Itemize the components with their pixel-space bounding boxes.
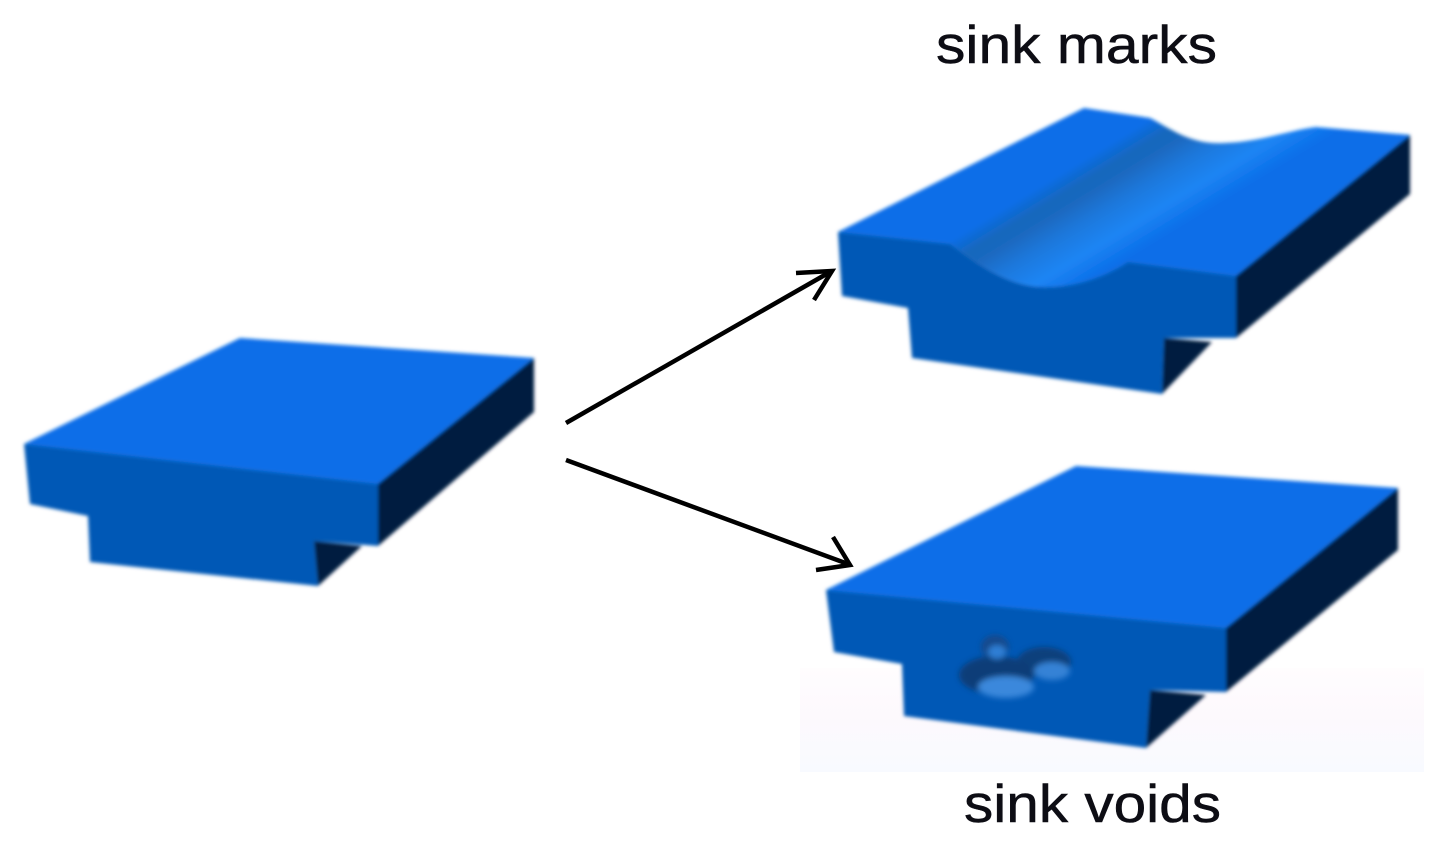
- label: sink voids: sink voids: [964, 775, 1221, 834]
- shape: sink voids part: [826, 466, 1398, 748]
- label: sink marks: sink marks: [936, 16, 1217, 75]
- arrow: to sink voids: [566, 460, 850, 570]
- shape: sink marks part: [838, 108, 1410, 394]
- arrow: to sink marks: [566, 271, 832, 423]
- icon: voids: [959, 635, 1071, 698]
- shape: original part: [24, 338, 534, 586]
- background: faint band behind sink voids part: [800, 668, 1424, 772]
